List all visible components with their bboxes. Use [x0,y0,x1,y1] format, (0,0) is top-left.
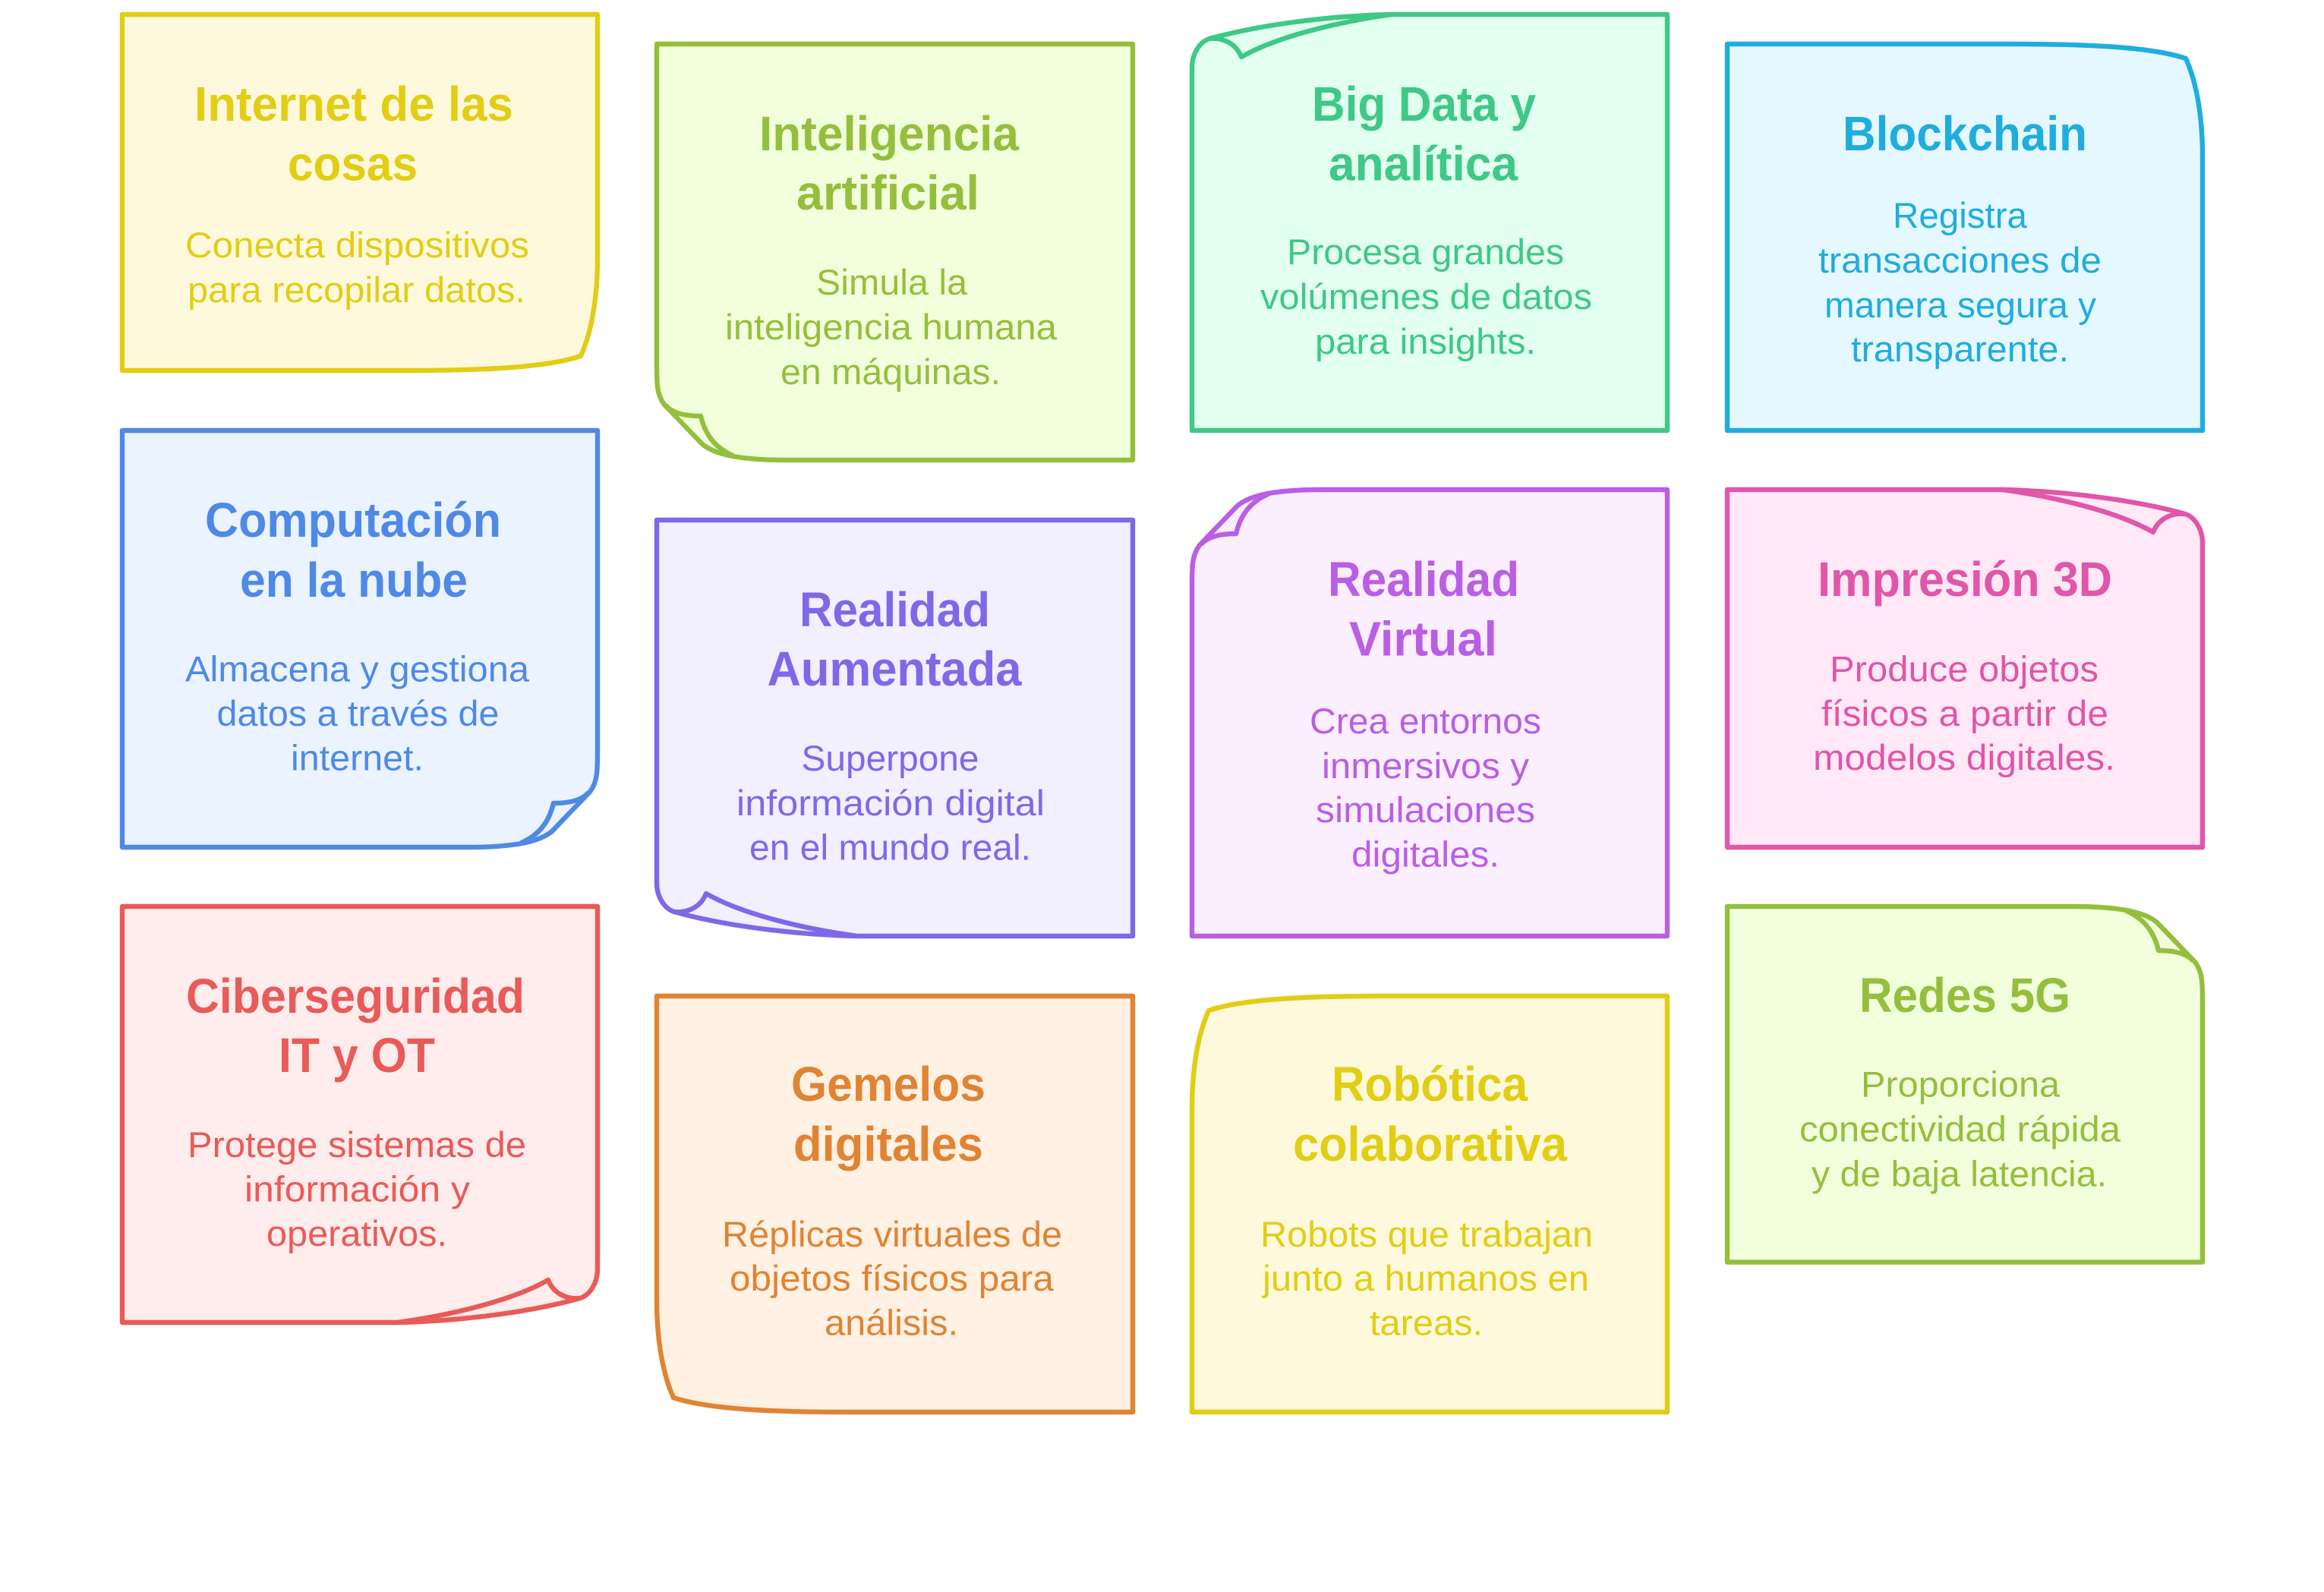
description [188,1124,526,1253]
heading [186,969,525,1083]
description [1260,1214,1593,1342]
description [1813,648,2115,777]
description: inmersivos y [1322,746,1530,786]
note shape: folded bottom-left corner [657,44,1133,460]
note shape: soft top-right corner [1727,44,2203,430]
description: información y [244,1169,471,1209]
description: Superpone [802,738,979,778]
description: inteligencia humana [725,307,1058,347]
description: para recopilar datos. [188,270,525,310]
heading [791,1057,985,1171]
page fold [1202,494,1268,544]
heading: Virtual [1349,612,1497,667]
page curl [397,1280,580,1322]
note shape: folded bottom-right corner [122,430,598,847]
panel: Gemelos digitales [657,996,1133,1412]
note shape: folded top-right corner [1727,906,2203,1262]
heading [205,493,501,607]
heading: Aumentada [767,642,1022,696]
heading: Impresión 3D [1818,552,2112,607]
panel: Inteligencia artificial [657,44,1133,460]
description: objetos físicos para [730,1258,1055,1298]
panel: Robótica colaborativa [1192,996,1667,1412]
description: Procesa grandes [1287,232,1564,272]
description: operativos. [266,1213,447,1253]
page fold [522,793,588,843]
heading: en la nube [240,553,468,607]
panel: Big Data y analítica [1192,14,1667,430]
description: internet. [291,738,424,777]
description: Registra [1893,195,2028,235]
note shape: curled bottom-left corner [657,520,1133,936]
heading [1293,1057,1567,1171]
heading: Computación [205,493,501,547]
heading: colaborativa [1293,1117,1567,1171]
heading: Blockchain [1843,106,2087,161]
page curl [1209,14,1392,57]
heading [767,582,1022,696]
description: Protege sistemas de [188,1124,526,1165]
description [185,648,530,777]
description: información digital [736,783,1045,823]
description: para insights. [1315,321,1536,361]
heading: digitales [793,1117,983,1171]
heading: Internet de las [194,77,513,131]
heading: cosas [288,137,418,191]
panel: Realidad Aumentada [657,520,1133,936]
description: Robots que trabajan [1260,1214,1593,1254]
heading: Gemelos [791,1057,985,1111]
heading: Robótica [1332,1057,1528,1111]
description [1818,195,2102,369]
description: Crea entornos [1310,701,1541,741]
description: Almacena y gestiona [185,648,530,689]
description [185,225,529,310]
description: tareas. [1370,1303,1483,1342]
description: transparente. [1851,329,2069,369]
panel: Blockchain [1727,44,2203,430]
description: manera segura y [1824,285,2097,325]
description [722,1214,1062,1342]
heading: artificial [796,166,979,220]
heading: analítica [1329,137,1518,191]
panel: Internet de las cosas [122,14,598,370]
description [1799,1064,2121,1193]
note shape: soft top-left corner [1192,996,1667,1412]
description: Réplicas virtuales de [722,1214,1062,1254]
panel: Computación en la nube [122,430,598,847]
description: Simula la [816,262,968,302]
description: transacciones de [1818,240,2102,280]
page fold [667,406,733,456]
panel: Impresión 3D [1727,490,2203,847]
description: modelos digitales. [1813,737,2115,777]
description: análisis. [825,1303,958,1342]
heading: Realidad [1328,552,1519,607]
description: simulaciones [1316,790,1535,830]
page curl [2002,490,2185,532]
panel: Ciberseguridad IT y OT [122,906,598,1322]
note shape: curled top-right corner [1727,490,2203,847]
description: digitales. [1351,834,1499,875]
description [725,262,1058,392]
page curl [674,894,857,936]
description: conectividad rápida [1799,1108,2121,1149]
heading: IT y OT [279,1028,435,1083]
heading: Redes 5G [1859,968,2070,1023]
note shape: folded top-left corner [1192,490,1667,936]
description: y de baja latencia. [1812,1153,2107,1193]
panel: Redes 5G [1727,906,2203,1262]
description: Proporciona [1861,1064,2061,1104]
panel: Realidad Virtual [1192,490,1667,936]
description: físicos a partir de [1821,693,2108,733]
heading [1312,77,1536,191]
description: Produce objetos [1830,648,2099,689]
note shape: curled top-left corner [1192,14,1667,430]
description: volúmenes de datos [1260,276,1592,317]
description: datos a través de [217,693,500,733]
description: en el mundo real. [749,828,1031,867]
heading: Realidad [799,582,990,637]
heading [1328,552,1519,667]
heading: Inteligencia [759,106,1019,161]
note shape: curled bottom-right corner [122,906,598,1322]
description: junto a humanos en [1261,1258,1589,1298]
heading [194,77,513,191]
note shape: soft bottom-right corner [122,14,598,370]
description [736,738,1045,867]
description: Conecta dispositivos [185,225,529,265]
description [1310,701,1541,875]
heading: Big Data y [1312,77,1536,131]
heading [759,106,1019,220]
description: en máquinas. [780,352,1001,392]
heading: Ciberseguridad [186,969,525,1023]
description [1260,232,1592,361]
page fold [2127,911,2193,960]
note shape: soft bottom-left corner [657,996,1133,1412]
